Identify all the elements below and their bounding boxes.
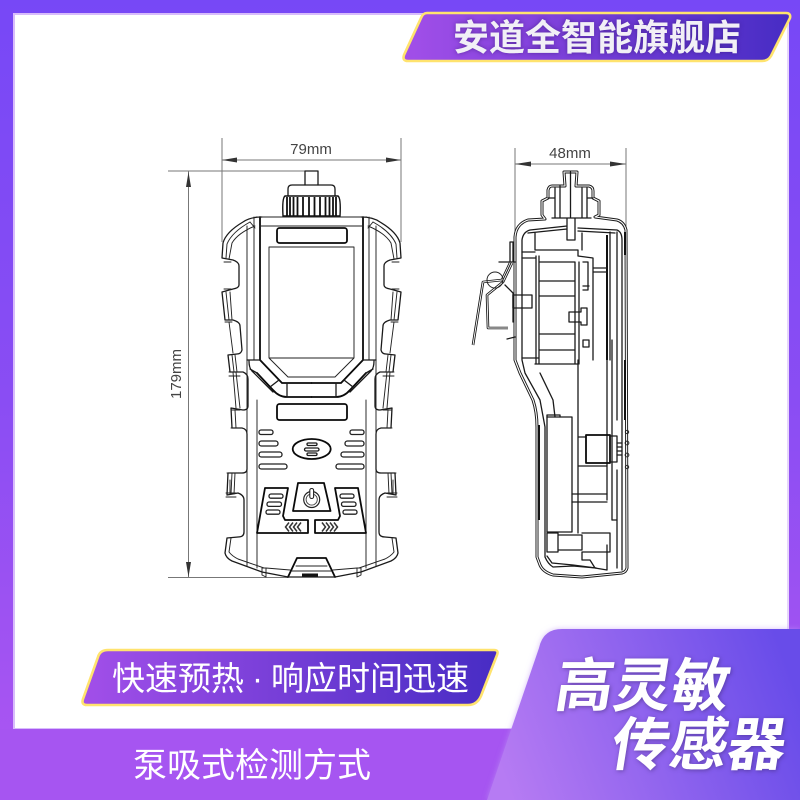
front view of the detector <box>222 171 401 577</box>
right half of casing <box>312 217 401 577</box>
side buttons <box>625 430 629 469</box>
big corner panel background <box>487 629 800 800</box>
shop name badge shape <box>404 13 790 61</box>
lower circuit details <box>547 360 617 570</box>
battery compartment <box>522 232 617 520</box>
front view dimension lines <box>168 138 401 578</box>
pump suction caption: 泵吸式检测方式 <box>133 747 371 785</box>
board connector <box>569 262 589 347</box>
belt clip <box>473 242 532 345</box>
board socket <box>586 435 622 463</box>
side view dimension lines <box>515 145 626 238</box>
left half of casing <box>222 217 312 577</box>
inner shell <box>522 172 622 570</box>
headline line one: 高灵敏 <box>551 654 735 719</box>
width label: 79mm <box>290 141 332 158</box>
bottom label slot <box>277 404 347 420</box>
depth label: 48mm <box>549 145 591 162</box>
top label slot <box>277 228 347 243</box>
power button <box>293 483 330 511</box>
bottom connector notch <box>288 558 335 577</box>
gas inlet cap <box>283 171 340 216</box>
sensor module <box>547 417 572 532</box>
bottom purple band <box>0 729 800 800</box>
height label: 179mm <box>168 349 185 399</box>
outer shell <box>515 172 627 577</box>
shop name: 安道全智能旗舰店 <box>453 17 741 58</box>
center oval button <box>293 439 331 459</box>
feature badge shape <box>82 650 498 705</box>
feature badge text: 快速预热·响应时间迅速 <box>112 660 469 697</box>
headline line two: 传感器 <box>607 713 791 778</box>
side section view of the detector <box>473 172 629 577</box>
